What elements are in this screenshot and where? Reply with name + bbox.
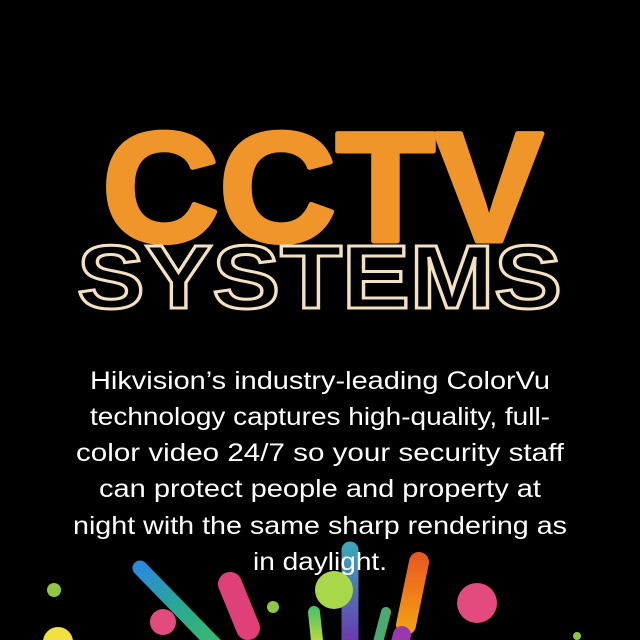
description paragraph: technology captures high-quality, full-: [90, 403, 550, 431]
description paragraph: color video 24/7 so your security staff: [76, 439, 564, 467]
description paragraph: [73, 367, 567, 576]
description paragraph: Hikvision’s industry-leading ColorVu: [90, 367, 550, 395]
decorative burst of colorful shapes: [43, 550, 581, 640]
description paragraph: can protect people and property at: [99, 475, 541, 503]
title: SYSTEMS outlined: SYSTEMS: [77, 228, 562, 328]
title: CCTV: CCTV: [102, 101, 543, 275]
description paragraph: in daylight.: [253, 548, 387, 576]
description paragraph: night with the same sharp rendering as: [73, 512, 567, 540]
